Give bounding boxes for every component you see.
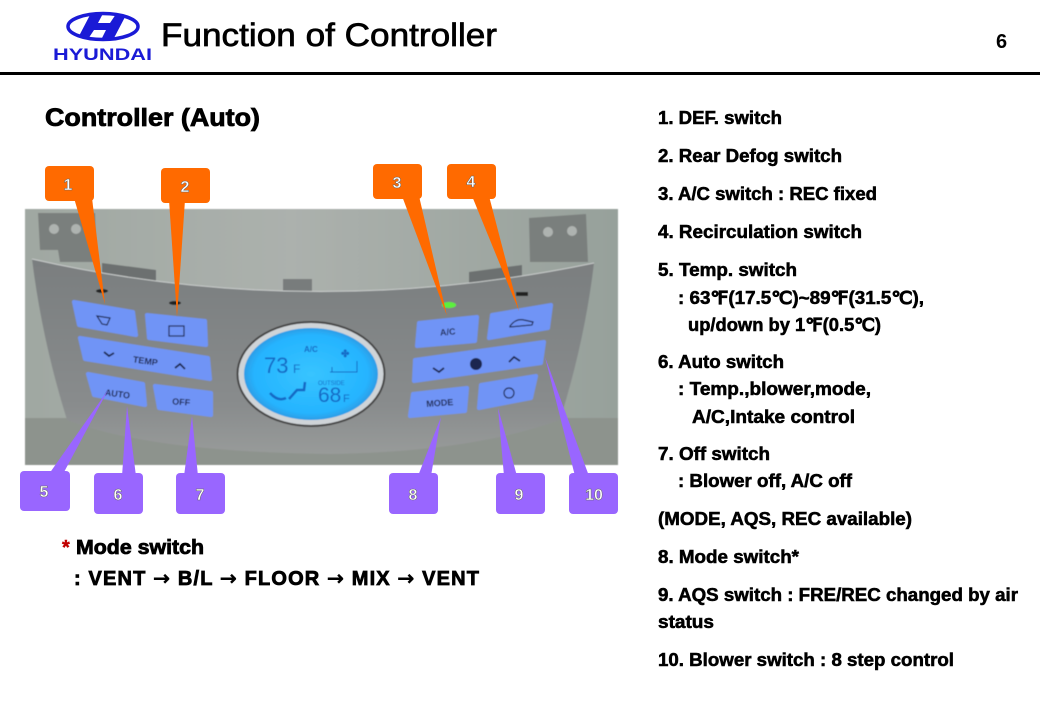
display	[238, 322, 384, 426]
switch list: A/C,Intake control	[692, 407, 855, 427]
callout 7: 7	[196, 487, 205, 504]
switch list: : Blower off, A/C off	[678, 471, 853, 491]
button labels: TEMP	[132, 354, 158, 368]
button labels: OFF	[172, 396, 191, 408]
mode switch note: : VENT → B/L → FLOOR → MIX → VENT	[74, 566, 479, 590]
callout 1	[45, 166, 105, 304]
callout 6	[94, 406, 143, 514]
switch list	[658, 108, 1018, 670]
display: OUTSIDE	[318, 381, 345, 387]
switch list: 3. A/C switch : REC fixed	[658, 184, 877, 204]
section heading: Controller (Auto)	[45, 104, 260, 132]
indicator LEDs	[96, 289, 108, 293]
bracket left	[38, 213, 97, 262]
callout 4: 4	[467, 174, 476, 191]
mode switch note: Mode switch	[76, 537, 204, 559]
display: ✤	[341, 349, 350, 360]
switch list: 5. Temp. switch	[658, 260, 797, 280]
display: 68	[318, 384, 341, 407]
callout 1: 1	[64, 177, 73, 194]
display: F	[343, 393, 350, 405]
callout 9	[496, 408, 545, 514]
title: Function of Controller	[161, 17, 497, 53]
callout 10: 10	[585, 487, 603, 504]
switch list: 6. Auto switch	[658, 352, 784, 372]
switch list: : 63℉(17.5℃)~89℉(31.5℃),	[678, 288, 924, 308]
display: F	[293, 362, 300, 376]
callout 6: 6	[114, 487, 123, 504]
switch list: 4. Recirculation switch	[658, 222, 862, 242]
switch list: (MODE, AQS, REC available)	[658, 509, 912, 529]
panel body	[32, 259, 594, 454]
button labels: A/C	[440, 326, 456, 338]
top tabs	[102, 263, 156, 282]
header logo: Hyundai	[53, 14, 152, 64]
switch list: 2. Rear Defog switch	[658, 146, 842, 166]
controller photo	[25, 209, 618, 465]
callout 7	[176, 416, 225, 514]
switch list: 10. Blower switch : 8 step control	[658, 650, 954, 670]
callout 3	[373, 164, 447, 316]
switch list: 8. Mode switch*	[658, 547, 799, 567]
display: 73	[264, 353, 288, 378]
mode switch note: *	[62, 537, 70, 559]
display: A/C	[304, 345, 318, 354]
switch list: 9. AQS switch : FRE/REC changed by air	[658, 585, 1018, 605]
callout 5	[20, 390, 108, 511]
button labels: AUTO	[104, 387, 131, 401]
switch list: : Temp.,blower,mode,	[678, 379, 871, 399]
callout 2: 2	[181, 179, 190, 196]
callout 4	[447, 164, 519, 311]
header logo: Hyundai: HYUNDAI	[53, 45, 152, 64]
mode switch note	[62, 537, 479, 590]
bracket right	[529, 214, 588, 262]
callout 3: 3	[393, 175, 402, 192]
buttons	[74, 302, 551, 416]
callout 5: 5	[40, 484, 49, 501]
callout 2	[161, 168, 210, 317]
callout 9: 9	[515, 487, 524, 504]
page number: 6	[996, 31, 1007, 53]
callout 8	[389, 417, 441, 514]
switch list: 7. Off switch	[658, 444, 770, 464]
switch list: up/down by 1℉(0.5℃)	[688, 315, 881, 335]
callout 8: 8	[409, 487, 418, 504]
callout 10	[545, 357, 618, 514]
switch list: 1. DEF. switch	[658, 108, 782, 128]
button labels	[97, 316, 533, 409]
button labels: MODE	[426, 397, 454, 409]
switch list: status	[658, 612, 714, 632]
